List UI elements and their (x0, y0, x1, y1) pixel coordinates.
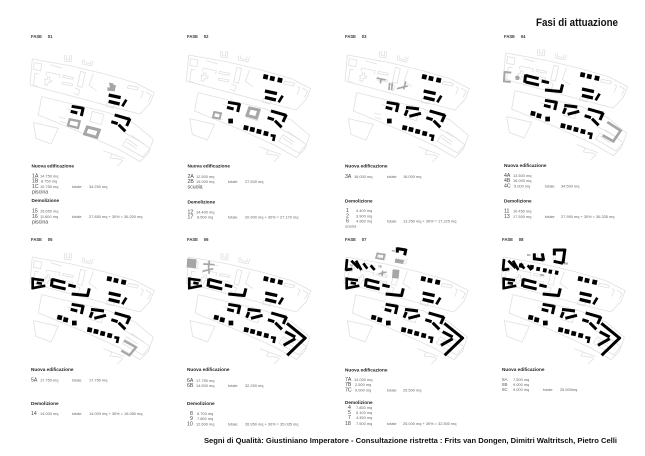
text: nuova edificazione 01: 8.750 mq (41, 179, 57, 184)
text: demolizione 05: 14.000 mq (40, 411, 58, 416)
text: demolizione 04: Demolizione (504, 198, 532, 204)
text: demolizione 01: 15 (32, 209, 38, 215)
text: demolizione 01 (32, 198, 142, 226)
text: nuova edificazione 05: 17.750 mq (40, 377, 58, 382)
text: demolizione 04 (504, 198, 614, 220)
text: nuova edificazione 02: 2A (188, 174, 194, 180)
text: nuova edificazione 05 (31, 367, 107, 383)
text: nuova edificazione 07: 7A (345, 377, 352, 383)
text: demolizione 02: 14.400 mq (196, 210, 214, 214)
text: nuova edificazione 08: totale (543, 387, 553, 392)
text: demolizione 04: 17.500 mq (513, 214, 531, 219)
text: nuova edificazione 01: piscina (32, 190, 48, 196)
text: demolizione 05: 14.000 mq + 30% = 18.080 mq (89, 411, 142, 416)
text: nuova edificazione 03: totale (387, 174, 397, 179)
text: demolizione 06: 6.700 mq (197, 411, 213, 416)
text: nuova edificazione 04 (504, 163, 579, 190)
text: demolizione 03: 2 (346, 214, 349, 220)
text: nuova edificazione 03: Nuova edificazione (345, 164, 388, 168)
text: demolizione 06: 7.650 mq (197, 416, 213, 421)
heading: fase 08: FASE 08 (502, 237, 524, 242)
footer credit: Segni di Qualità: Giustiniano Imperatore - Consultazione ristretta : Frits van Dongen, Dimitri Waltritsch, Pietro Celli (204, 436, 617, 445)
text: demolizione 06: 9 (190, 416, 193, 422)
text: nuova edificazione 08: 8B (502, 382, 508, 387)
text: nuova edificazione 08 (502, 367, 577, 392)
text: nuova edificazione 05: 17.750 mq (89, 377, 107, 382)
map: fase 08: 8A (540, 273, 544, 277)
panel: fase 03 (345, 34, 469, 228)
panel: fase 06 (187, 237, 311, 427)
text: nuova edificazione 07: 25.500 mq (403, 387, 421, 392)
text: demolizione 04: 13 (504, 214, 510, 220)
map: fase 03 (345, 51, 469, 162)
text: demolizione 03: 4.950 mq (356, 219, 372, 224)
text: demolizione 07 (345, 400, 456, 427)
panel: fase 01 (30, 34, 154, 226)
text: nuova edificazione 04: 34.500 mq (561, 184, 579, 188)
text: demolizione 05 (31, 401, 142, 417)
text: demolizione 07: 7.500 mq (356, 421, 372, 426)
map: fase 07: 7C (391, 249, 396, 253)
text: nuova edificazione 02 (188, 164, 263, 190)
text: demolizione 06 (187, 401, 298, 427)
text: nuova edificazione 06: 6B (187, 383, 194, 389)
text: nuova edificazione 01 (32, 164, 107, 196)
text: demolizione 03: 6 (346, 219, 349, 225)
text: demolizione 03: 4.400 mq (356, 208, 372, 213)
text: demolizione 05: totale (72, 411, 82, 416)
text: nuova edificazione 07: totale (387, 387, 397, 392)
map: fase 01 (30, 55, 154, 166)
text: nuova edificazione 08: 9.000 mq (513, 387, 529, 392)
panel: fase 05 (30, 237, 154, 417)
text: nuova edificazione 04: 16.000 mq (513, 178, 531, 183)
text: nuova edificazione 03: 3A (345, 174, 352, 180)
panel: fase 08 (501, 237, 625, 392)
text: nuova edificazione 02: totale (228, 179, 238, 184)
text: nuova edificazione 04: 4B (504, 178, 511, 184)
text: demolizione 03: scuola (345, 224, 357, 228)
text: demolizione 07: 5.100 mq (356, 410, 372, 415)
text: demolizione 03: 13.250 mq + 30% = 17.225 mq (403, 219, 456, 224)
text: nuova edificazione 06: Nuova edificazione (187, 367, 230, 372)
text: demolizione 02: 17 (188, 215, 193, 221)
text: demolizione 04: 11 (504, 209, 509, 215)
text: nuova edificazione 02: 2B (188, 179, 194, 185)
text: nuova edificazione 02: 27.500 mq (245, 179, 263, 184)
text: nuova edificazione 01: Nuova edificazione (32, 164, 74, 168)
text: nuova edificazione 01: 1C (32, 184, 39, 190)
text: demolizione 01: Demolizione (32, 198, 60, 203)
text: nuova edificazione 06 (187, 367, 263, 389)
text: nuova edificazione 01: 14.750 mq (40, 174, 58, 178)
text: demolizione 07: 4 (348, 405, 351, 411)
text: demolizione 06: 10 (187, 421, 193, 427)
text: demolizione 07: 7.850 mq (356, 405, 372, 410)
text: demolizione 02: 12 (188, 210, 193, 216)
text: demolizione 02: 20.900 mq + 30% = 27.170 mq (245, 215, 298, 220)
text: demolizione 02: 6.500 mq (197, 215, 213, 220)
text: demolizione 07: 25.000 mq + 30% = 32.500 mq (403, 421, 456, 426)
text: nuova edificazione 04: 4C (504, 184, 511, 190)
text: nuova edificazione 03 (345, 164, 421, 180)
text: nuova edificazione 06: 32.250 mq (245, 383, 263, 388)
text: demolizione 04: 10.450 mq (513, 209, 531, 214)
text: nuova edificazione 06: 17.750 mq (196, 378, 214, 383)
text: demolizione 03: 1 (346, 208, 349, 214)
map: fase 08: 8C (527, 253, 532, 257)
map: fase 06 (187, 253, 311, 364)
text: demolizione 01: 15.650 mq (40, 209, 58, 214)
text: demolizione 01: 16 (32, 214, 38, 220)
panel: fase 02 (186, 34, 311, 221)
text: demolizione 06: 12.600 mq (196, 421, 214, 426)
text: demolizione 04: 27.950 mq + 30% = 36.335 mq (561, 214, 614, 219)
text: demolizione 03: Demolizione (345, 198, 373, 204)
text: demolizione 02: totale (228, 215, 238, 220)
text: nuova edificazione 07 (345, 368, 421, 393)
heading: fase 07: FASE 07 (345, 237, 367, 242)
text: nuova edificazione 02: Nuova edificazione (188, 164, 230, 168)
text: demolizione 07: 4.450 mq (356, 415, 372, 420)
map: fase 05 (30, 253, 154, 364)
text: demolizione 05: 14 (31, 411, 37, 417)
text: nuova edificazione 07: Nuova edificazione (345, 368, 388, 372)
map: fase 04 (503, 49, 628, 160)
text: demolizione 01: 11.600 mq (40, 214, 58, 219)
text: nuova edificazione 01: totale (72, 184, 82, 189)
text: nuova edificazione 05: 5A (31, 377, 38, 383)
text: nuova edificazione 02: 15.000 mq (196, 179, 214, 184)
text: nuova edificazione 08: 7.500 mq (513, 377, 529, 382)
text: nuova edificazione 01: 10.750 mq (40, 184, 58, 189)
heading: fase 01: FASE 01 (31, 34, 53, 39)
text: nuova edificazione 02: scuola (188, 184, 203, 190)
map: fase 07: 7A (349, 264, 353, 268)
text: demolizione 06: 8 (190, 411, 193, 417)
text: demolizione 02: Demolizione (188, 200, 216, 204)
text: nuova edificazione 07: 9.000 mq (355, 387, 371, 392)
text: nuova edificazione 04: 5.000 mq (514, 184, 530, 188)
text: nuova edificazione 04: 4A (504, 173, 511, 179)
text: nuova edificazione 08: Nuova edificazione (502, 367, 545, 372)
text: nuova edificazione 02: 12.500 mq (196, 174, 214, 179)
text: nuova edificazione 08: 9.000 mq (513, 382, 529, 387)
text: demolizione 01: piscina (32, 220, 48, 226)
text: demolizione 06: Demolizione (187, 401, 215, 406)
text: demolizione 07: 18 (345, 421, 351, 427)
text: nuova edificazione 08: 8C (502, 387, 509, 392)
text: demolizione 07: 7 (348, 415, 351, 421)
text: nuova edificazione 04: 13.500 mq (513, 173, 531, 178)
text: demolizione 06: totale (228, 421, 238, 426)
text: nuova edificazione 04: Nuova edificazione (504, 163, 547, 168)
title: Fasi di attuazione (536, 17, 618, 29)
text: demolizione 05: Demolizione (31, 401, 59, 406)
text: nuova edificazione 05: totale (72, 377, 82, 382)
text: demolizione 04: totale (545, 214, 555, 219)
text: demolizione 02 (188, 200, 298, 221)
panel: fase 04 (503, 34, 628, 220)
heading: fase 05: FASE 05 (31, 237, 53, 242)
text: demolizione 07: 5 (348, 410, 351, 416)
heading: fase 03: FASE 03 (345, 34, 367, 39)
text: nuova edificazione 01: 1A (32, 174, 39, 180)
heading: fase 06: FASE 06 (187, 237, 209, 242)
text: nuova edificazione 06: totale (228, 383, 238, 388)
text: nuova edificazione 07: 2.500 mq (355, 382, 371, 387)
text: demolizione 03: 3.900 mq (356, 214, 372, 218)
text: nuova edificazione 06: 14.500 mq (196, 383, 214, 388)
text: nuova edificazione 06: 6A (187, 378, 194, 384)
map: fase 08: 8B (564, 262, 568, 266)
text: nuova edificazione 07: 14.000 mq (354, 377, 372, 382)
map: fase 08 (501, 249, 625, 364)
text: nuova edificazione 08: 8A (502, 377, 509, 382)
panel: fase 07 (344, 237, 468, 427)
text: demolizione 03 (345, 198, 456, 228)
text: nuova edificazione 03: 16.000 mq (354, 174, 372, 179)
text: nuova edificazione 07: 7B (345, 382, 352, 388)
text: demolizione 07: Demolizione (345, 400, 373, 405)
text: nuova edificazione 01: 34.250 mq (89, 184, 107, 189)
map: fase 02 (186, 51, 311, 162)
text: nuova edificazione 05: Nuova edificazione (31, 367, 74, 372)
text: nuova edificazione 04: totale (545, 184, 555, 188)
text: nuova edificazione 03: 16.000 mq (403, 174, 421, 179)
map: fase 07 (344, 247, 468, 364)
text: nuova edificazione 07: 7C (345, 387, 352, 393)
heading: fase 04: FASE 04 (504, 34, 526, 39)
text: nuova edificazione 08: 25.500mq (560, 387, 577, 392)
text: demolizione 06: 26.950 mq + 30% = 35.035 mq (245, 421, 298, 426)
heading: fase 02: FASE 02 (187, 34, 209, 39)
text: demolizione 03: totale (387, 219, 397, 224)
text: demolizione 07: totale (387, 421, 397, 426)
text: demolizione 01: 27.850 mq + 30% = 36.200 mq (89, 214, 142, 219)
map: fase 07: 7B (378, 264, 382, 268)
text: nuova edificazione 01: 1B (32, 179, 39, 185)
text: demolizione 01: totale (72, 214, 82, 219)
